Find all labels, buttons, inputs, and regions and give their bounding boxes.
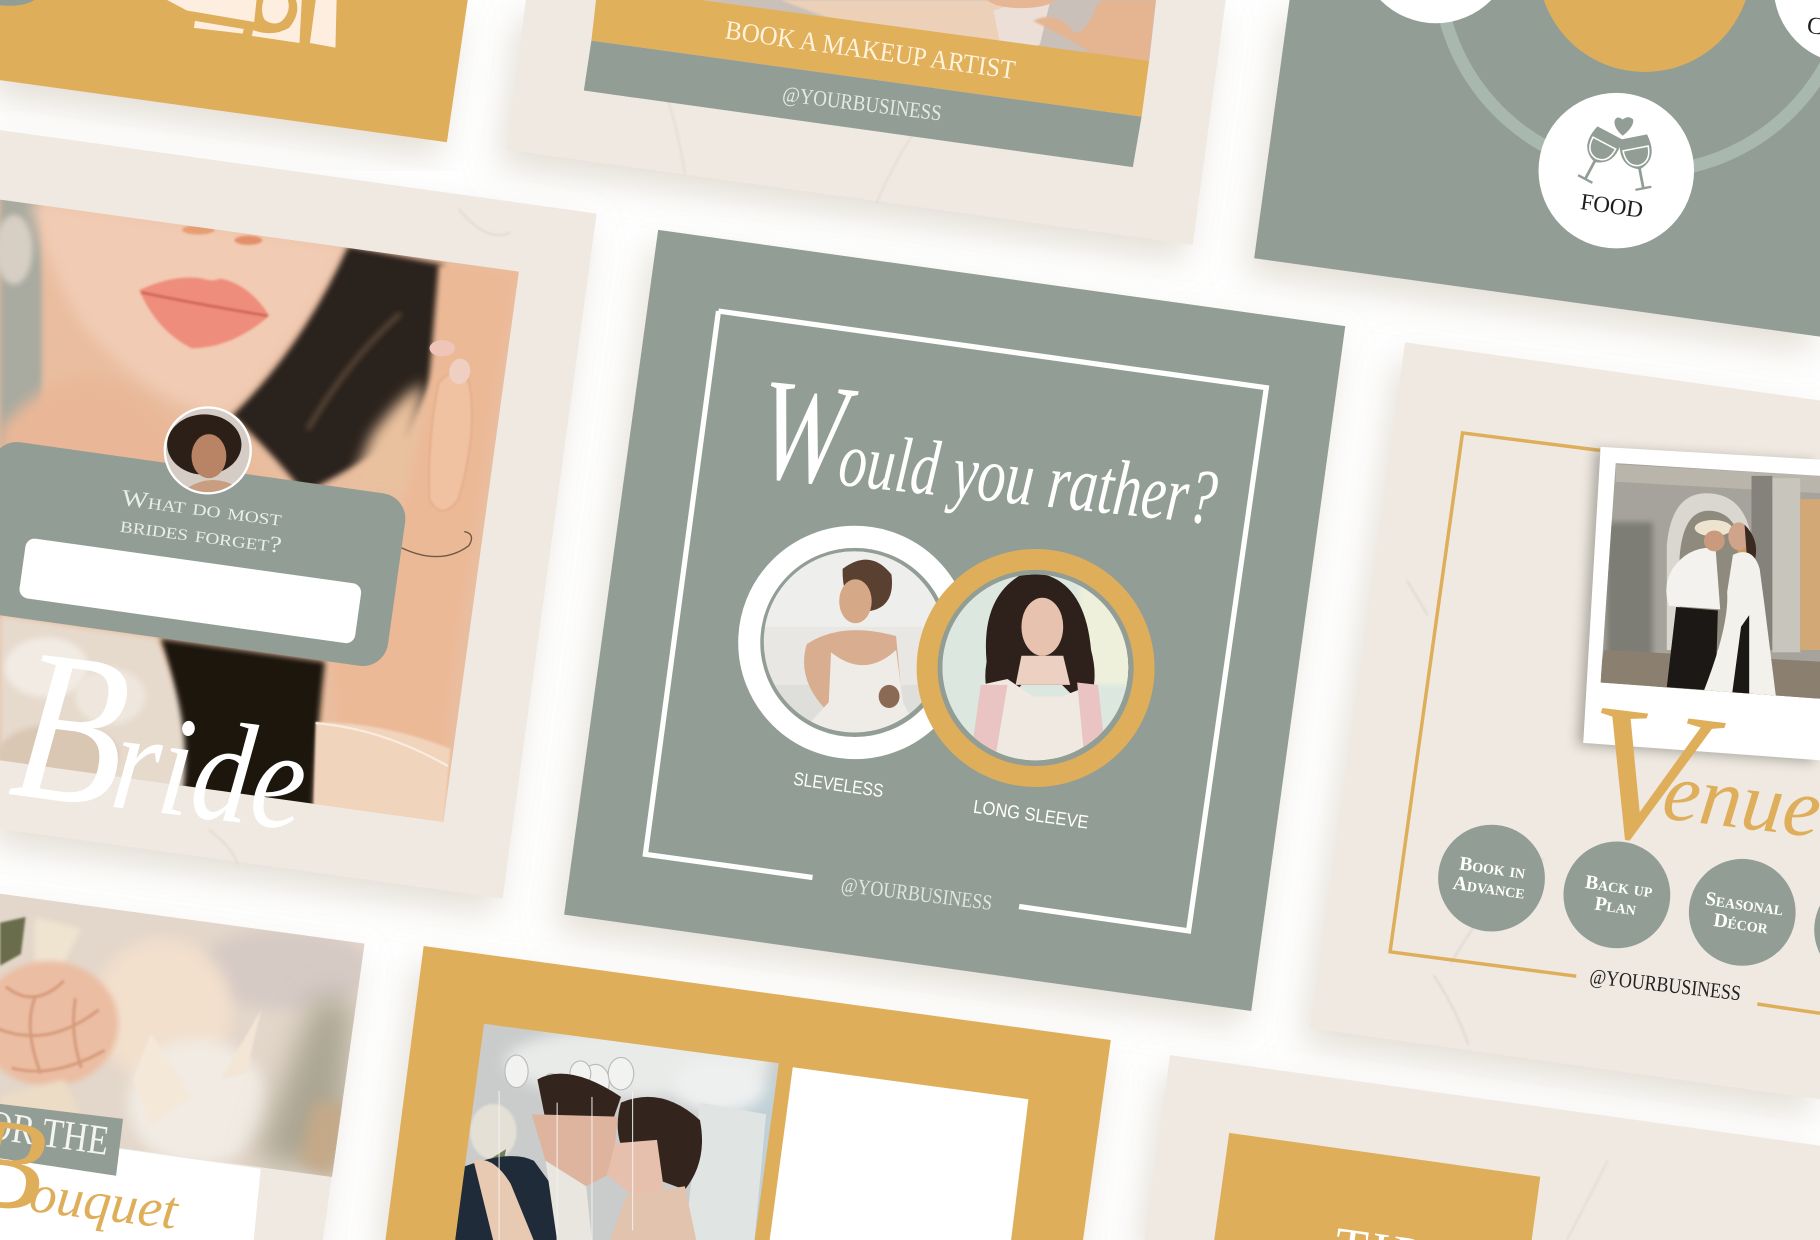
photo: bouquet: [0, 888, 371, 1184]
man: [1666, 548, 1720, 609]
photo: couple with crystals: [447, 1016, 789, 1240]
tip: book in advance: Book in: [1458, 853, 1527, 884]
gold block: [1214, 1133, 1540, 1240]
option: sleeveless photo: [749, 537, 960, 748]
circle: food: [1539, 93, 1694, 248]
photo: couple at temple: [1596, 458, 1820, 702]
circle: gold hub: [1538, 0, 1752, 72]
panel: top-right sage venue checklist card: [1254, 0, 1820, 337]
woman: [1728, 522, 1746, 550]
question text: [119, 485, 284, 559]
label: long sleeve: LONG SLEEVE: [972, 796, 1090, 833]
gold frame: [1390, 433, 1820, 1013]
tip: back up plan: Plan: [1593, 893, 1638, 920]
sage band: [584, 41, 1142, 167]
tip: book in advance: Advance: [1452, 872, 1526, 904]
script title: venue: V: [1571, 662, 1732, 889]
handle: @YOURBUSINESS: [1588, 964, 1742, 1005]
tip: partly visible fourth: [1814, 876, 1820, 983]
icon: toasting glasses: [1571, 117, 1659, 192]
lips: [139, 278, 269, 348]
photo: makeup artist: [704, 0, 1156, 62]
avatar photo: [162, 406, 255, 499]
tip: book in advance: [1438, 825, 1545, 931]
handle: @YOURBUSINESS: [840, 873, 994, 915]
label: food: FOOD: [1579, 189, 1645, 224]
panel: left bride question card: [0, 130, 597, 898]
script title: would you rather: Would you rather?: [751, 348, 1227, 556]
panel: bottom-left bouquet card: [0, 888, 371, 1240]
polaroid: [1583, 447, 1820, 760]
tip: back up plan: Back up: [1584, 871, 1654, 902]
panel: bottom-center gold photo card: [385, 946, 1111, 1240]
question text: brides forget?: [119, 512, 283, 559]
answer box: [18, 537, 362, 644]
label: sleveless: SLEVELESS: [792, 768, 885, 801]
panel: top makeup artist card: [507, 0, 1226, 245]
tip: back up plan: [1563, 842, 1670, 948]
tip: seasonal decor: Seasonal: [1704, 888, 1785, 920]
option: long sleeve photo: [927, 559, 1144, 777]
panel: top-left gold card: [0, 0, 468, 142]
photo: bride close-up: [0, 192, 522, 830]
white frame: [645, 311, 1266, 931]
circle: top-left white: [1358, 0, 1514, 23]
question text: What do most: [120, 485, 284, 532]
handle: @YOURBUSINESS: [781, 81, 943, 125]
panel: center would you rather card: [564, 230, 1345, 1011]
white text block: [0, 1132, 261, 1240]
ring: [1438, 0, 1820, 172]
script title: bride: Bride: [1, 603, 323, 877]
circle: right white: [1774, 0, 1820, 64]
heading: book a makeup artist: BOOK A MAKEUP ARTIST: [723, 15, 1017, 85]
white text box: [770, 1067, 1028, 1240]
panel: right venue card: [1310, 342, 1820, 1099]
icon: laptop and mug: [167, 0, 337, 48]
gold band: [591, 0, 1149, 117]
tip: seasonal decor: Décor: [1712, 909, 1770, 939]
panel: bottom-right marble tips card: [1144, 1055, 1820, 1240]
tip: seasonal decor: [1689, 859, 1796, 966]
question box: [0, 406, 409, 669]
